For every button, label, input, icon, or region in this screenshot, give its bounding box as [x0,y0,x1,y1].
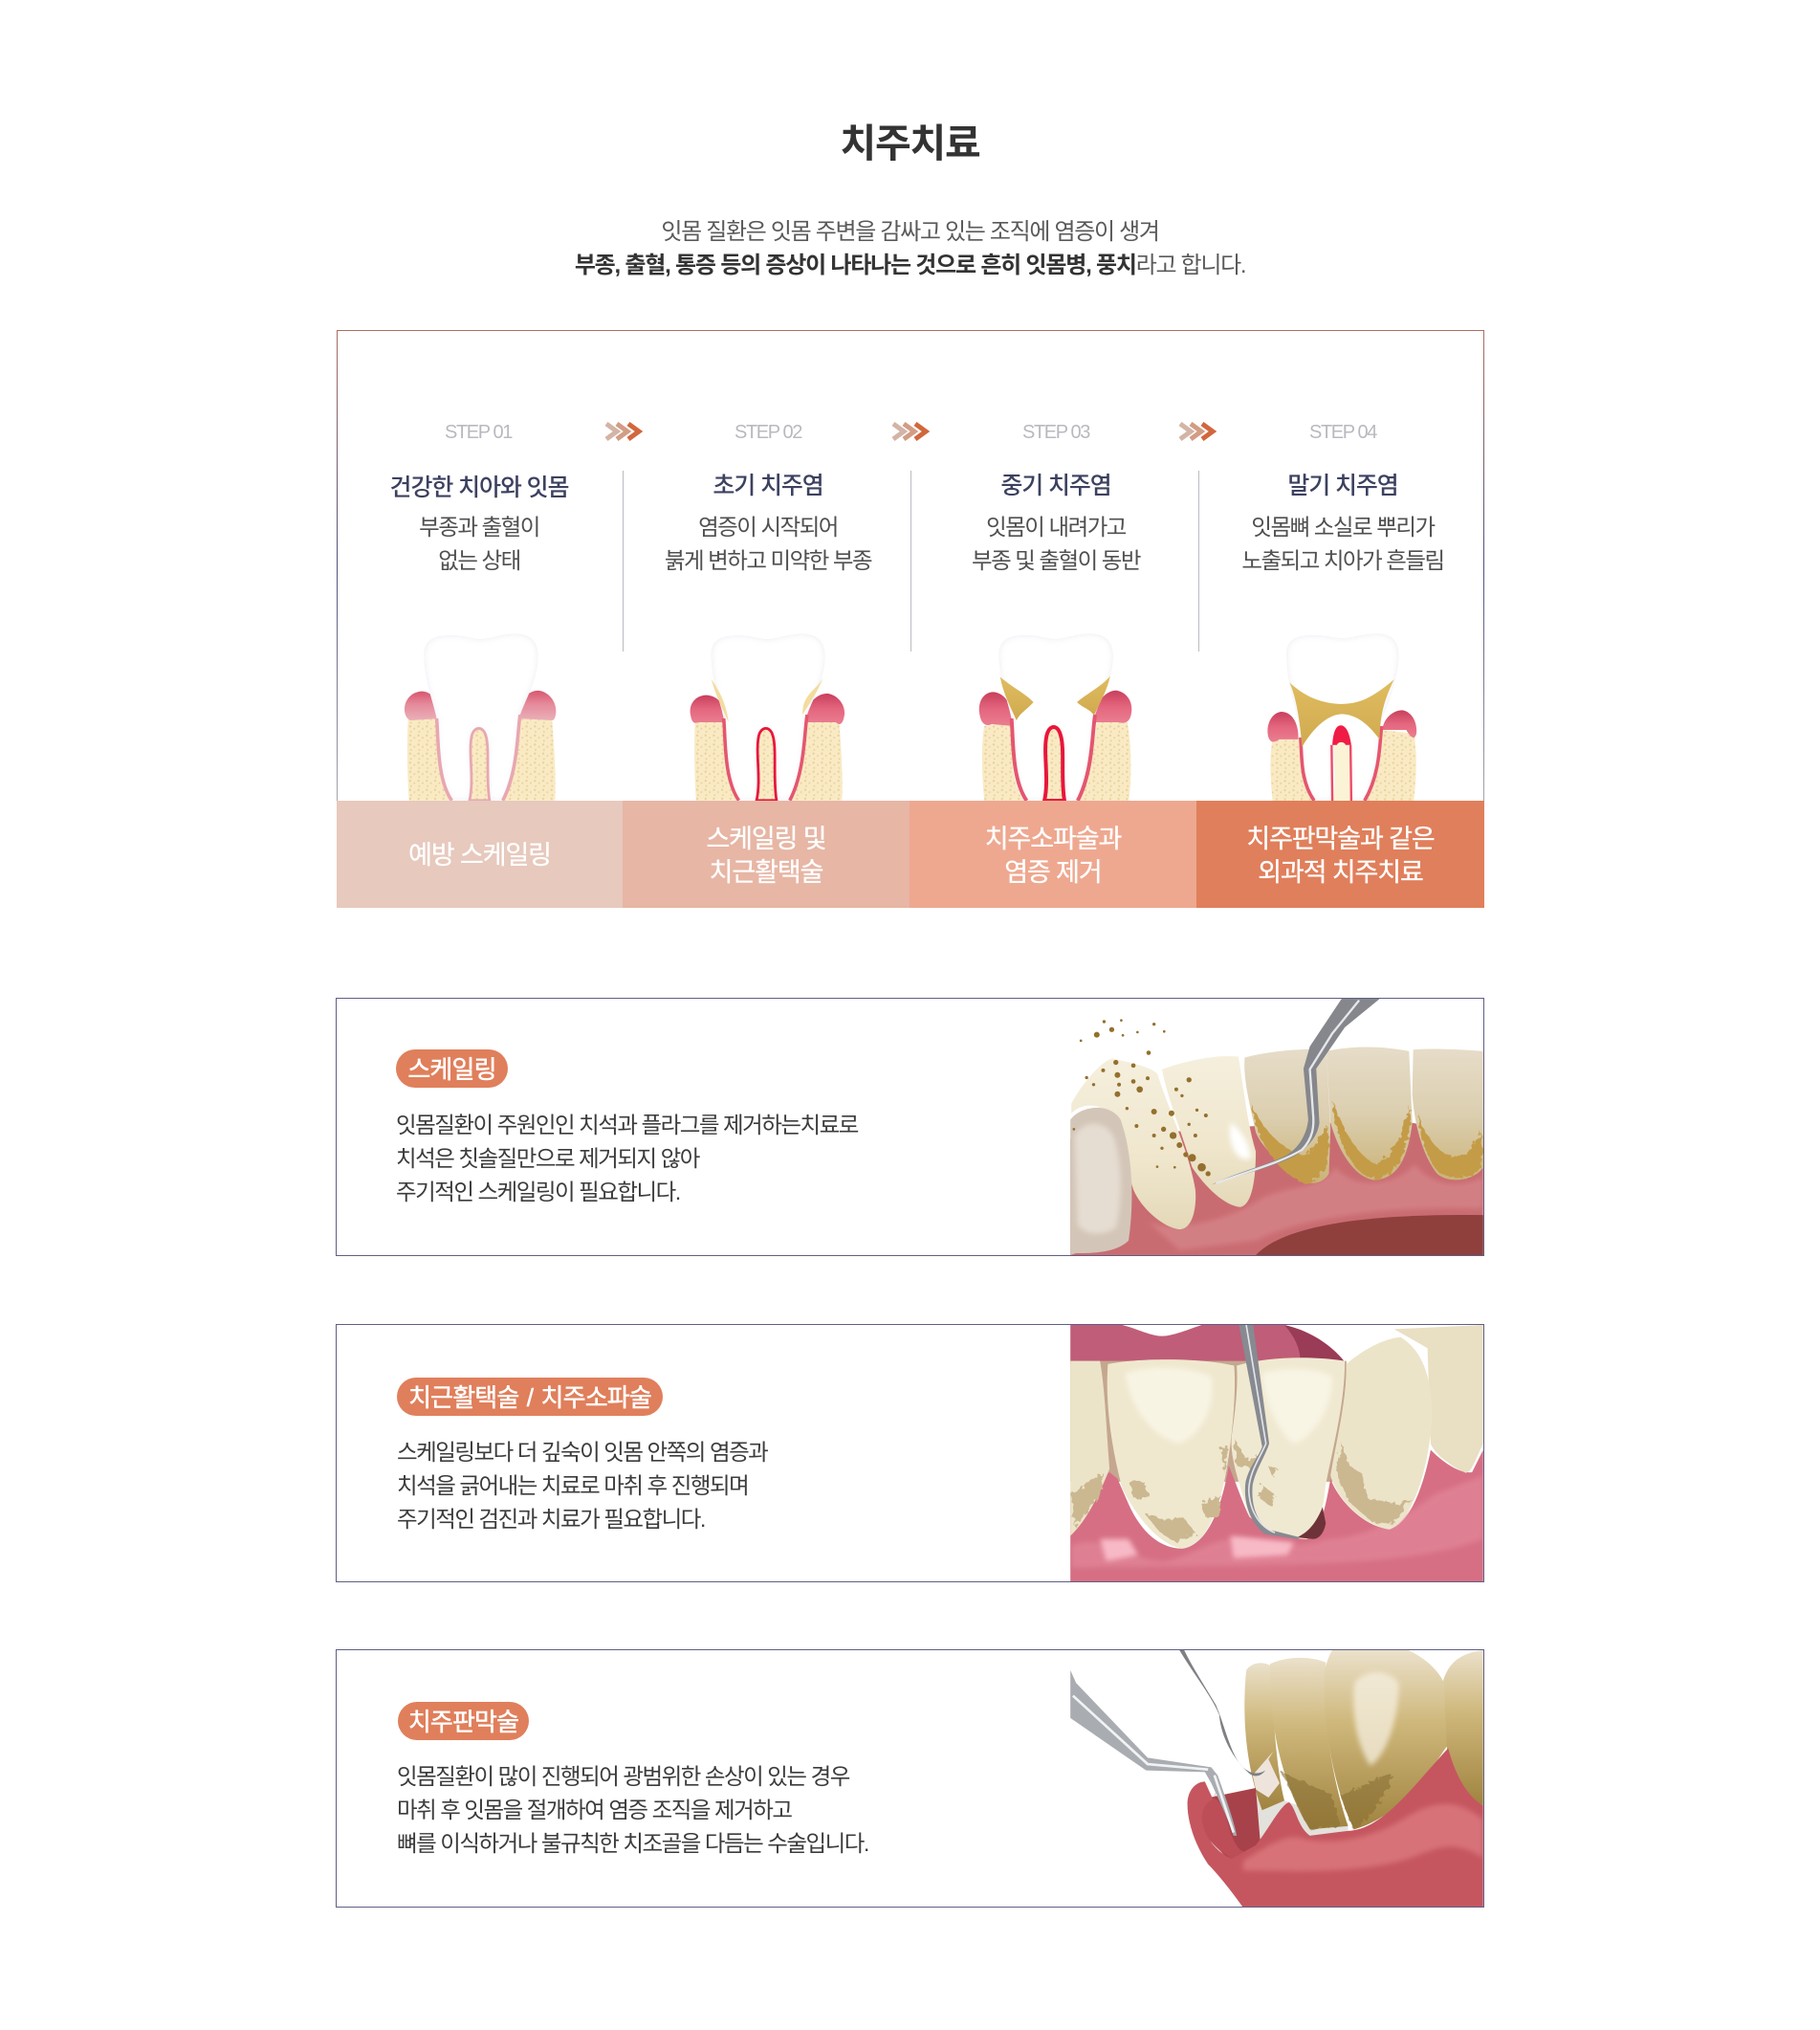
pill heading: flap surgery [398,1702,529,1740]
icon: advanced periodontitis tooth [1267,633,1417,801]
arrow: step 3 to 4 [1178,422,1217,441]
pill heading: scaling: 스케일링 [407,1055,496,1084]
step 1 description: 없는 상태 [438,548,520,573]
step 2 heading: 초기 치주염 [713,473,823,499]
icon: early periodontitis tooth [691,633,845,801]
intro text [575,219,1245,278]
step 4 description: 잇몸뼈 소실로 뿌리가 [1251,515,1435,540]
step 1 description: 부종과 출혈이 [419,515,539,540]
step 2 label: STEP 02 [735,422,801,443]
step 1 label: STEP 01 [445,422,512,443]
step 4 description: 노출되고 치아가 흔들림 [1241,548,1444,573]
description: scaling [396,1113,859,1204]
intro text: 부종, 출혈, 통증 등의 증상이 나타나는 것으로 흔히 잇몸병, 풍치라고 합니다. [575,253,1245,278]
title: 치주치료 [840,121,980,165]
treatment band: scaling and root planing [623,801,910,908]
treatment band: curettage: 염증 제거 [1004,857,1102,886]
treatment band: scaling and root planing: 스케일링 및 [706,825,826,853]
treatment band: curettage [910,801,1196,908]
panel: periodontal disease stages [337,330,1484,908]
treatment band: curettage: 치주소파술과 [985,825,1121,853]
treatment band: preventive scaling [337,801,623,908]
pill heading: root planing [397,1378,663,1416]
description: scaling: 치석은 칫솔질만으로 제거되지 않아 [396,1146,699,1171]
treatment band: preventive scaling: 예방 스케일링 [408,841,551,870]
treatment band: flap surgery: 치주판막술과 같은 [1246,825,1435,853]
step 3 label: STEP 03 [1022,422,1089,443]
pill heading: root planing: 치근활택술 / 치주소파술 [408,1383,651,1412]
description: root planing: 치석을 긁어내는 치료로 마취 후 진행되며 [397,1473,748,1498]
step 3 description: 부종 및 출혈이 동반 [972,548,1140,573]
step 1 description [419,515,539,573]
illustration: scaling teeth [1070,999,1483,1255]
treatment band: scaling and root planing: 치근활택술 [710,857,822,886]
description: flap surgery: 뼈를 이식하거나 불규칙한 치조골을 다듬는 수술입니다. [397,1831,868,1856]
description: root planing [397,1440,768,1532]
step 4 description [1241,515,1444,573]
treatment band: flap surgery: 외과적 치주치료 [1258,857,1423,886]
panel: root planing and curettage [336,1324,1484,1582]
panel: flap surgery [336,1649,1484,1908]
pill heading: flap surgery: 치주판막술 [408,1708,518,1736]
pill heading: scaling [396,1049,508,1088]
step 3 description [972,515,1141,573]
description: root planing: 스케일링보다 더 깊숙이 잇몸 안쪽의 염증과 [397,1440,767,1465]
step 2 description: 붉게 변하고 미약한 부종 [665,548,871,573]
illustration: flap surgery teeth [1070,1650,1483,1907]
intro text: 잇몸 질환은 잇몸 주변을 감싸고 있는 조직에 염증이 생겨 [661,219,1159,245]
description: flap surgery [397,1764,868,1856]
icon: healthy tooth [404,633,557,801]
step 4 heading: 말기 치주염 [1287,473,1398,499]
arrow: step 1 to 2 [604,422,643,441]
icon: moderate periodontitis tooth [979,633,1132,801]
step 4 label: STEP 04 [1309,422,1376,443]
description: flap surgery: 잇몸질환이 많이 진행되어 광범위한 손상이 있는 경우 [397,1764,849,1789]
step 3 heading: 중기 치주염 [1000,473,1111,499]
step 3 description: 잇몸이 내려가고 [986,515,1126,540]
description: scaling: 주기적인 스케일링이 필요합니다. [396,1180,680,1204]
treatment band: flap surgery [1196,801,1484,908]
step 2 description: 염증이 시작되어 [698,515,838,540]
description: root planing: 주기적인 검진과 치료가 필요합니다. [397,1507,705,1532]
description: flap surgery: 마취 후 잇몸을 절개하여 염증 조직을 제거하고 [397,1798,791,1822]
step 2 description [665,515,872,573]
description: scaling: 잇몸질환이 주원인인 치석과 플라그를 제거하는치료로 [396,1113,858,1137]
arrow: step 2 to 3 [891,422,930,441]
panel: scaling [336,998,1484,1256]
illustration: root planing teeth [1070,1325,1483,1581]
step 1 heading: 건강한 치아와 잇몸 [390,474,568,501]
